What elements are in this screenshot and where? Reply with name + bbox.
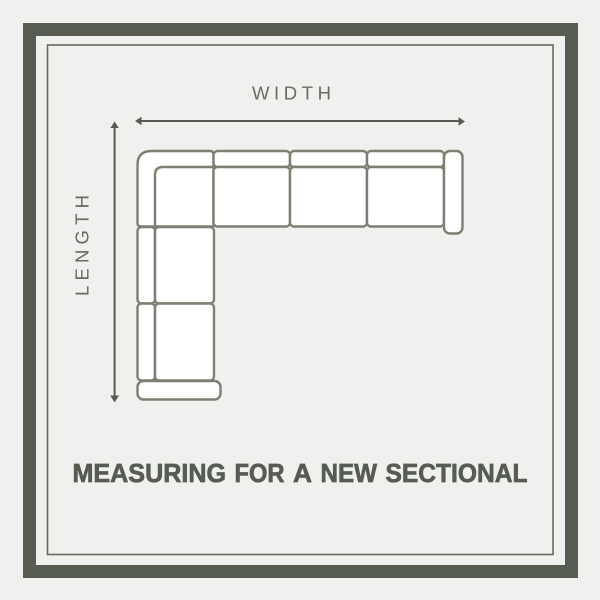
back cushion 2: [290, 151, 367, 167]
seat cushion 1: [214, 167, 290, 226]
corner seat cushion: [155, 167, 214, 226]
seat cushion 2: [290, 167, 367, 226]
left back cushion 2: [138, 304, 155, 380]
bottom arm: [138, 381, 220, 400]
left seat cushion 2: [155, 304, 214, 380]
back cushion 3: [367, 151, 444, 167]
arrow: length dimension: [110, 122, 119, 402]
title: NEW: [320, 458, 377, 488]
title: FOR: [234, 458, 285, 488]
left back cushion 1: [138, 227, 155, 304]
inner thin frame: [48, 45, 553, 554]
title: MEASURING: [72, 458, 226, 488]
right arm: [444, 151, 462, 234]
left seat cushion 1: [155, 227, 214, 304]
label: width: WIDTH: [252, 82, 331, 104]
seat cushion 3: [367, 167, 444, 226]
arrow: width dimension: [135, 117, 465, 126]
back cushion 1: [214, 151, 290, 167]
label: length: LENGTH: [72, 195, 92, 296]
title: SECTIONAL: [386, 458, 528, 488]
corner back section: [138, 151, 214, 226]
sectional sofa diagram: [138, 151, 462, 400]
title: A: [293, 458, 312, 488]
title: [72, 458, 528, 488]
